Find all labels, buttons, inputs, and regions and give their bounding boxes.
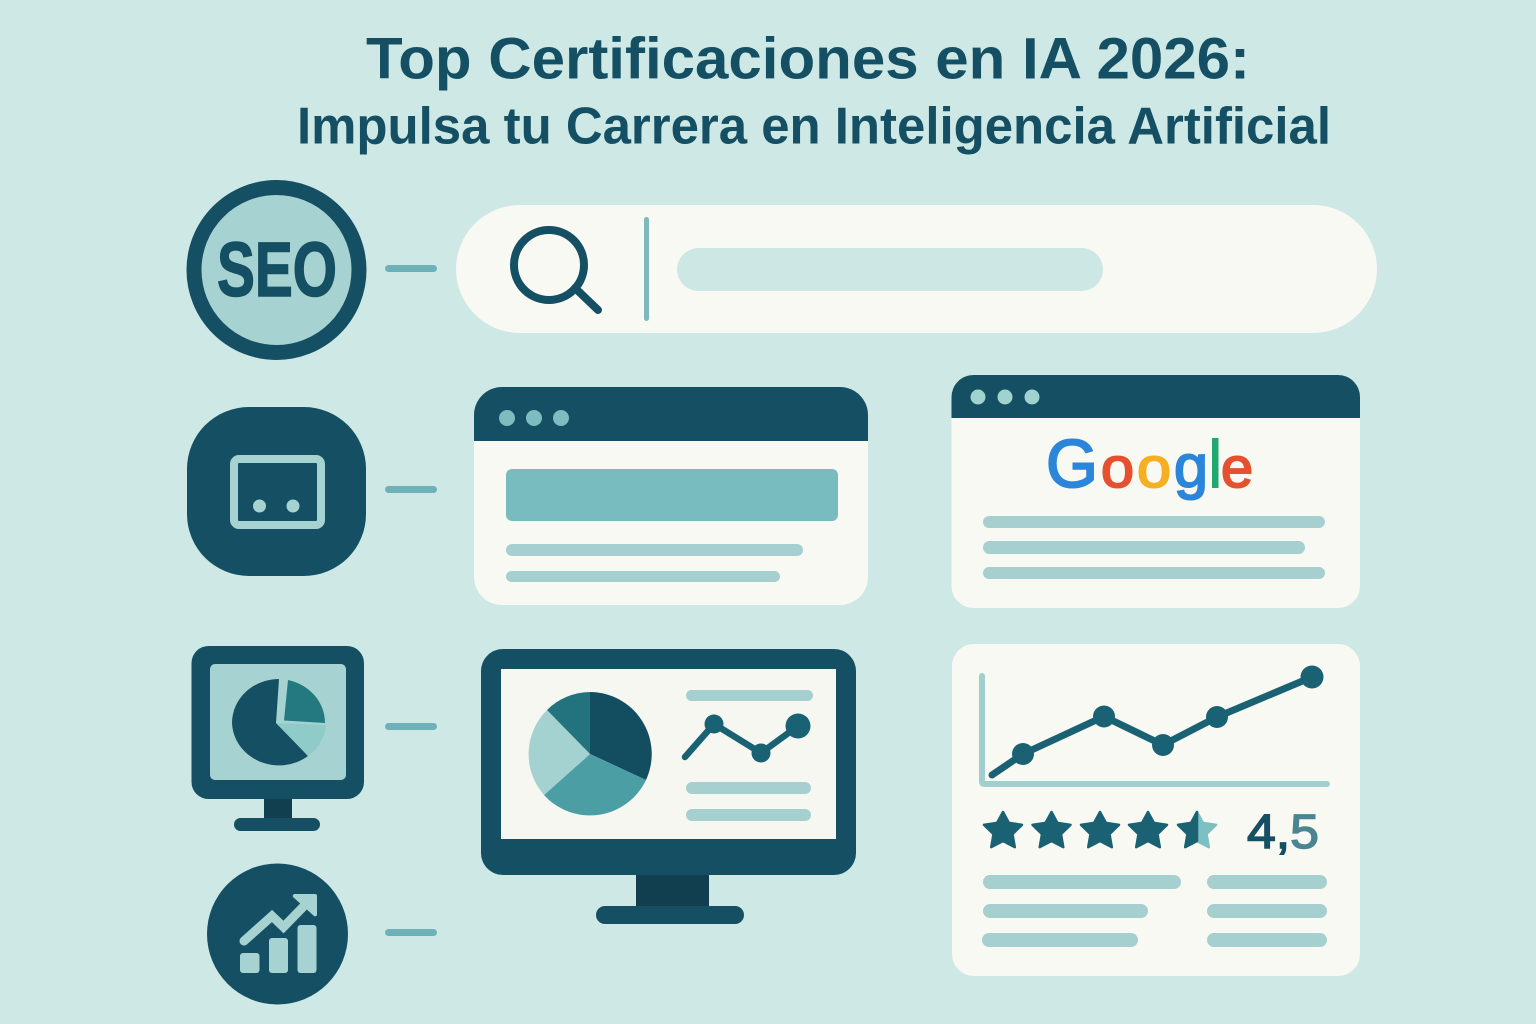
icon: SEO badge [194,188,359,352]
Google logo: e [1221,436,1253,500]
search bar [456,205,1377,333]
mini line chart [685,714,810,762]
connector: browser badge to window [385,486,437,493]
Google logo [1046,426,1253,502]
text placeholder lines [982,875,1327,947]
icon: SEO badge: SEO [217,227,337,313]
icon: growth chart badge [207,864,348,1004]
connector: growth badge [385,929,437,936]
connector: small monitor to dashboard [385,723,437,730]
panel: Google results window [952,375,1360,608]
star rating [984,812,1216,847]
icon: browser window badge [187,407,366,576]
panel: browser window [474,387,868,605]
connector: SEO to search bar [385,265,437,272]
Google logo: o [1137,436,1171,500]
Google logo: o [1101,436,1134,500]
search divider [644,217,649,321]
rating value: 4,5 [1247,806,1319,859]
icon: small monitor with pie chart [192,646,364,831]
Google logo: G [1046,426,1098,502]
Google logo: g [1174,433,1208,500]
title: Impulsa tu Carrera en Inteligencia Artificial [297,98,1331,156]
line chart [979,666,1330,787]
title: Top Certificaciones en IA 2026: [366,26,1250,92]
panel: ranking chart and rating [952,644,1360,976]
panel: desktop monitor dashboard [481,649,856,924]
icon: magnifying glass [514,230,598,310]
title [297,26,1331,156]
pie chart [529,692,652,815]
search input placeholder [677,248,1103,291]
